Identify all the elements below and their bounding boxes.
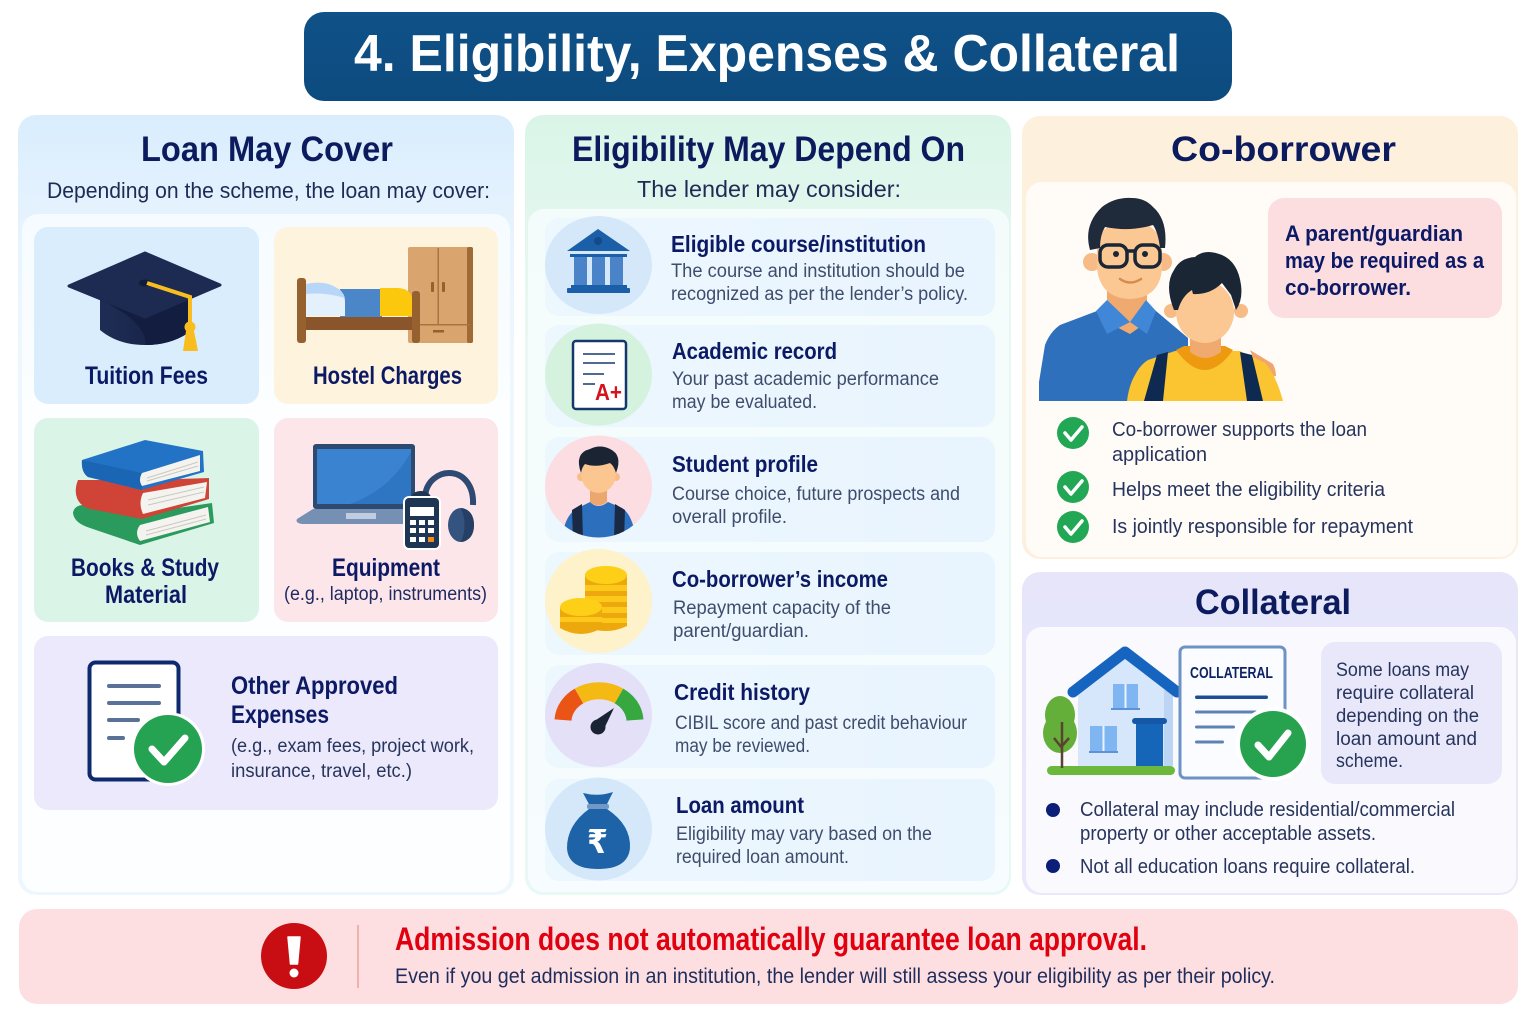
callout: parent/guardian: A parent/guardian: [1285, 221, 1463, 246]
row: eligible course/institution: [545, 216, 995, 316]
row: eligible course/institution: recognized as per the lender’s policy.: [671, 284, 968, 305]
panel: eligibility may depend on: [525, 115, 1011, 895]
bullet list: collateral notes: [1046, 799, 1455, 878]
icon: rupee money bag: ₹: [587, 822, 608, 861]
callout: some loans require collateral: Some loans may: [1336, 660, 1469, 681]
card: equipment: Equipment: [332, 554, 441, 582]
card: other approved expenses: (e.g., exam fees, project work,: [231, 736, 474, 757]
warning detail: Even if you get admission in an institution, the lender will still assess your eligibility as per their policy.: [395, 965, 1275, 988]
callout: some loans require collateral: loan amount and: [1336, 729, 1477, 750]
card: hostel charges: [274, 227, 498, 404]
callout: some loans require collateral: require collateral: [1336, 683, 1474, 704]
callout: some loans require collateral: scheme.: [1336, 751, 1403, 772]
card: equipment: [274, 418, 498, 622]
row: student profile: overall profile.: [672, 507, 787, 528]
icon: document with check: [90, 662, 205, 786]
icon: exclamation: [261, 923, 327, 989]
icon: student: [545, 436, 652, 540]
heading: eligibility: Eligibility May Depend On: [572, 130, 965, 169]
icon: report card with A+: [545, 324, 652, 426]
heading: collateral: Collateral: [1195, 583, 1351, 622]
card: books and study material: [34, 418, 259, 622]
row: loan amount: required loan amount.: [676, 847, 849, 868]
row: academic record: [545, 324, 995, 427]
checklist: co-borrower role: application: [1112, 444, 1207, 466]
panel: loan may cover: [18, 115, 514, 895]
icon: stack of books: [73, 440, 214, 545]
icon: bed and wardrobe: [297, 247, 473, 343]
callout: parent/guardian: may be required as a: [1285, 248, 1485, 273]
illustration: house and collateral document: COLLATERAL: [1190, 665, 1273, 682]
row: eligible course/institution: Eligible course/institution: [671, 231, 926, 257]
row: loan amount: [545, 778, 995, 881]
row: credit history: [545, 663, 995, 768]
card: other approved expenses: Expenses: [231, 701, 329, 729]
title banner: 4. Eligibility, Expenses & Collateral: [354, 25, 1180, 83]
bullet list: collateral notes: property or other acceptable assets.: [1080, 823, 1376, 845]
callout: some loans require collateral: depending on the: [1336, 706, 1479, 727]
warning headline: Admission does not automatically guarantee loan approval.: [395, 921, 1147, 957]
checklist: co-borrower role: Helps meet the eligibility criteria: [1112, 479, 1386, 501]
row: eligible course/institution: The course and institution should be: [671, 261, 965, 282]
callout: some loans require collateral: [1321, 642, 1502, 784]
card: books and study material: Books & Study: [71, 554, 219, 582]
card: other approved expenses: insurance, travel, etc.): [231, 761, 412, 782]
title banner: [304, 12, 1232, 101]
row: academic record: Academic record: [672, 338, 837, 364]
callout: parent/guardian: co-borrower.: [1285, 275, 1411, 300]
row: academic record: may be evaluated.: [672, 392, 817, 413]
heading: co-borrower: Co-borrower: [1171, 130, 1396, 169]
heading: loan may cover: Loan May Cover: [141, 130, 393, 169]
row: loan amount: Eligibility may vary based on the: [676, 824, 932, 845]
icon: laptop, calculator, headphones: [297, 444, 474, 549]
row: student profile: Course choice, future prospects and: [672, 484, 960, 505]
icon: rupee money bag: [545, 778, 652, 880]
card: equipment: (e.g., laptop, instruments): [284, 584, 487, 605]
icon: graduation cap: [69, 253, 220, 351]
checklist: co-borrower role: Is jointly responsible for repayment: [1112, 516, 1413, 538]
icon: coins: [545, 549, 652, 653]
subheading: loan may cover: Depending on the scheme, the loan may cover:: [47, 178, 490, 203]
row: co-borrower's income: Co-borrower’s income: [672, 566, 888, 592]
card: other approved expenses: [34, 636, 498, 810]
bullet list: collateral notes: Collateral may include residential/commercial: [1080, 799, 1455, 821]
card: tuition fees: [34, 227, 259, 404]
row: co-borrower's income: parent/guardian.: [673, 621, 809, 642]
row: academic record: Your past academic performance: [672, 369, 939, 390]
row: credit history: may be reviewed.: [675, 736, 810, 757]
panel: co-borrower: [1022, 116, 1518, 559]
row: student profile: [545, 436, 995, 542]
row: loan amount: Loan amount: [676, 792, 804, 818]
bullet list: collateral notes: Not all education loans require collateral.: [1080, 856, 1415, 878]
callout: parent/guardian: [1268, 198, 1502, 318]
illustration: house and collateral document: [1043, 647, 1310, 781]
row: credit history: CIBIL score and past credit behaviour: [675, 713, 968, 734]
card: books and study material: Material: [105, 581, 187, 609]
illustration: parent and student: [1039, 198, 1283, 401]
card: other approved expenses: Other Approved: [231, 672, 398, 700]
checklist: co-borrower role: [1057, 417, 1413, 543]
icon: report card with A+: A+: [595, 379, 622, 405]
panel: collateral: [1022, 572, 1518, 895]
icon: institution building: [545, 216, 652, 314]
row: credit history: Credit history: [674, 679, 810, 705]
card: tuition fees: Tuition Fees: [85, 362, 208, 390]
icon: credit score gauge: [545, 663, 652, 767]
row: co-borrower's income: Repayment capacity of the: [673, 598, 891, 619]
checklist: co-borrower role: Co-borrower supports the loan: [1112, 419, 1367, 441]
subheading: eligibility: The lender may consider:: [637, 176, 901, 202]
warning banner: [19, 909, 1518, 1004]
row: student profile: Student profile: [672, 451, 818, 477]
card: hostel charges: Hostel Charges: [313, 362, 462, 390]
row: co-borrower's income: [545, 549, 995, 655]
